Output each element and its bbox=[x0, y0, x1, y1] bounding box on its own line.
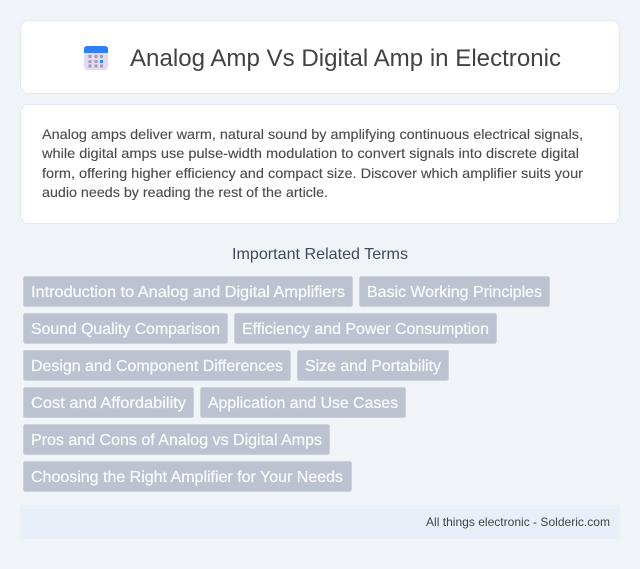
tag: choosing bbox=[24, 462, 352, 492]
tag: sound quality bbox=[24, 314, 228, 344]
tag: design: Design and Component Differences bbox=[31, 358, 283, 375]
tag: sound quality: Sound Quality Comparison bbox=[31, 321, 220, 338]
tag: efficiency bbox=[234, 314, 496, 344]
panel: summary bbox=[20, 104, 620, 224]
text block: summary paragraph: while digital amps use pulse-width modulation to convert signals into discrete digital bbox=[41, 145, 579, 161]
text block: summary paragraph: audio needs by reading the rest of the article. bbox=[42, 184, 328, 200]
tag: introduction: Introduction to Analog and Digital Amplifiers bbox=[31, 284, 345, 301]
tag list bbox=[24, 276, 550, 492]
tag: introduction bbox=[24, 276, 352, 306]
tag: efficiency: Efficiency and Power Consumption bbox=[242, 321, 489, 338]
tag: working principles: Basic Working Principles bbox=[367, 284, 542, 301]
text block: summary paragraph bbox=[41, 126, 583, 200]
tag: working principles bbox=[360, 276, 550, 306]
panel: header bbox=[20, 20, 620, 94]
text block: summary paragraph: Analog amps deliver warm, natural sound by amplifying continuous electrical signals, bbox=[42, 126, 583, 142]
tag: size bbox=[298, 350, 448, 380]
footer bbox=[20, 505, 620, 539]
tag: cost: Cost and Affordability bbox=[31, 395, 186, 412]
tag: application bbox=[200, 388, 406, 418]
tag: pros and cons bbox=[24, 424, 330, 454]
text block: summary paragraph: form, offering higher efficiency and compact size. Discover which amplifier suits your bbox=[42, 165, 583, 181]
tag: cost bbox=[24, 388, 194, 418]
tag: application: Application and Use Cases bbox=[208, 395, 398, 412]
tag: pros and cons: Pros and Cons of Analog vs Digital Amps bbox=[31, 432, 322, 449]
tag: choosing: Choosing the Right Amplifier for Your Needs bbox=[31, 469, 343, 486]
tag: size: Size and Portability bbox=[305, 358, 441, 375]
heading: related terms: Important Related Terms bbox=[232, 246, 408, 263]
tag: design bbox=[24, 350, 290, 380]
footer text: All things electronic - Solderic.com bbox=[426, 515, 610, 529]
icon: calendar bbox=[84, 46, 108, 70]
title: Analog Amp Vs Digital Amp in Electronic bbox=[130, 45, 561, 72]
